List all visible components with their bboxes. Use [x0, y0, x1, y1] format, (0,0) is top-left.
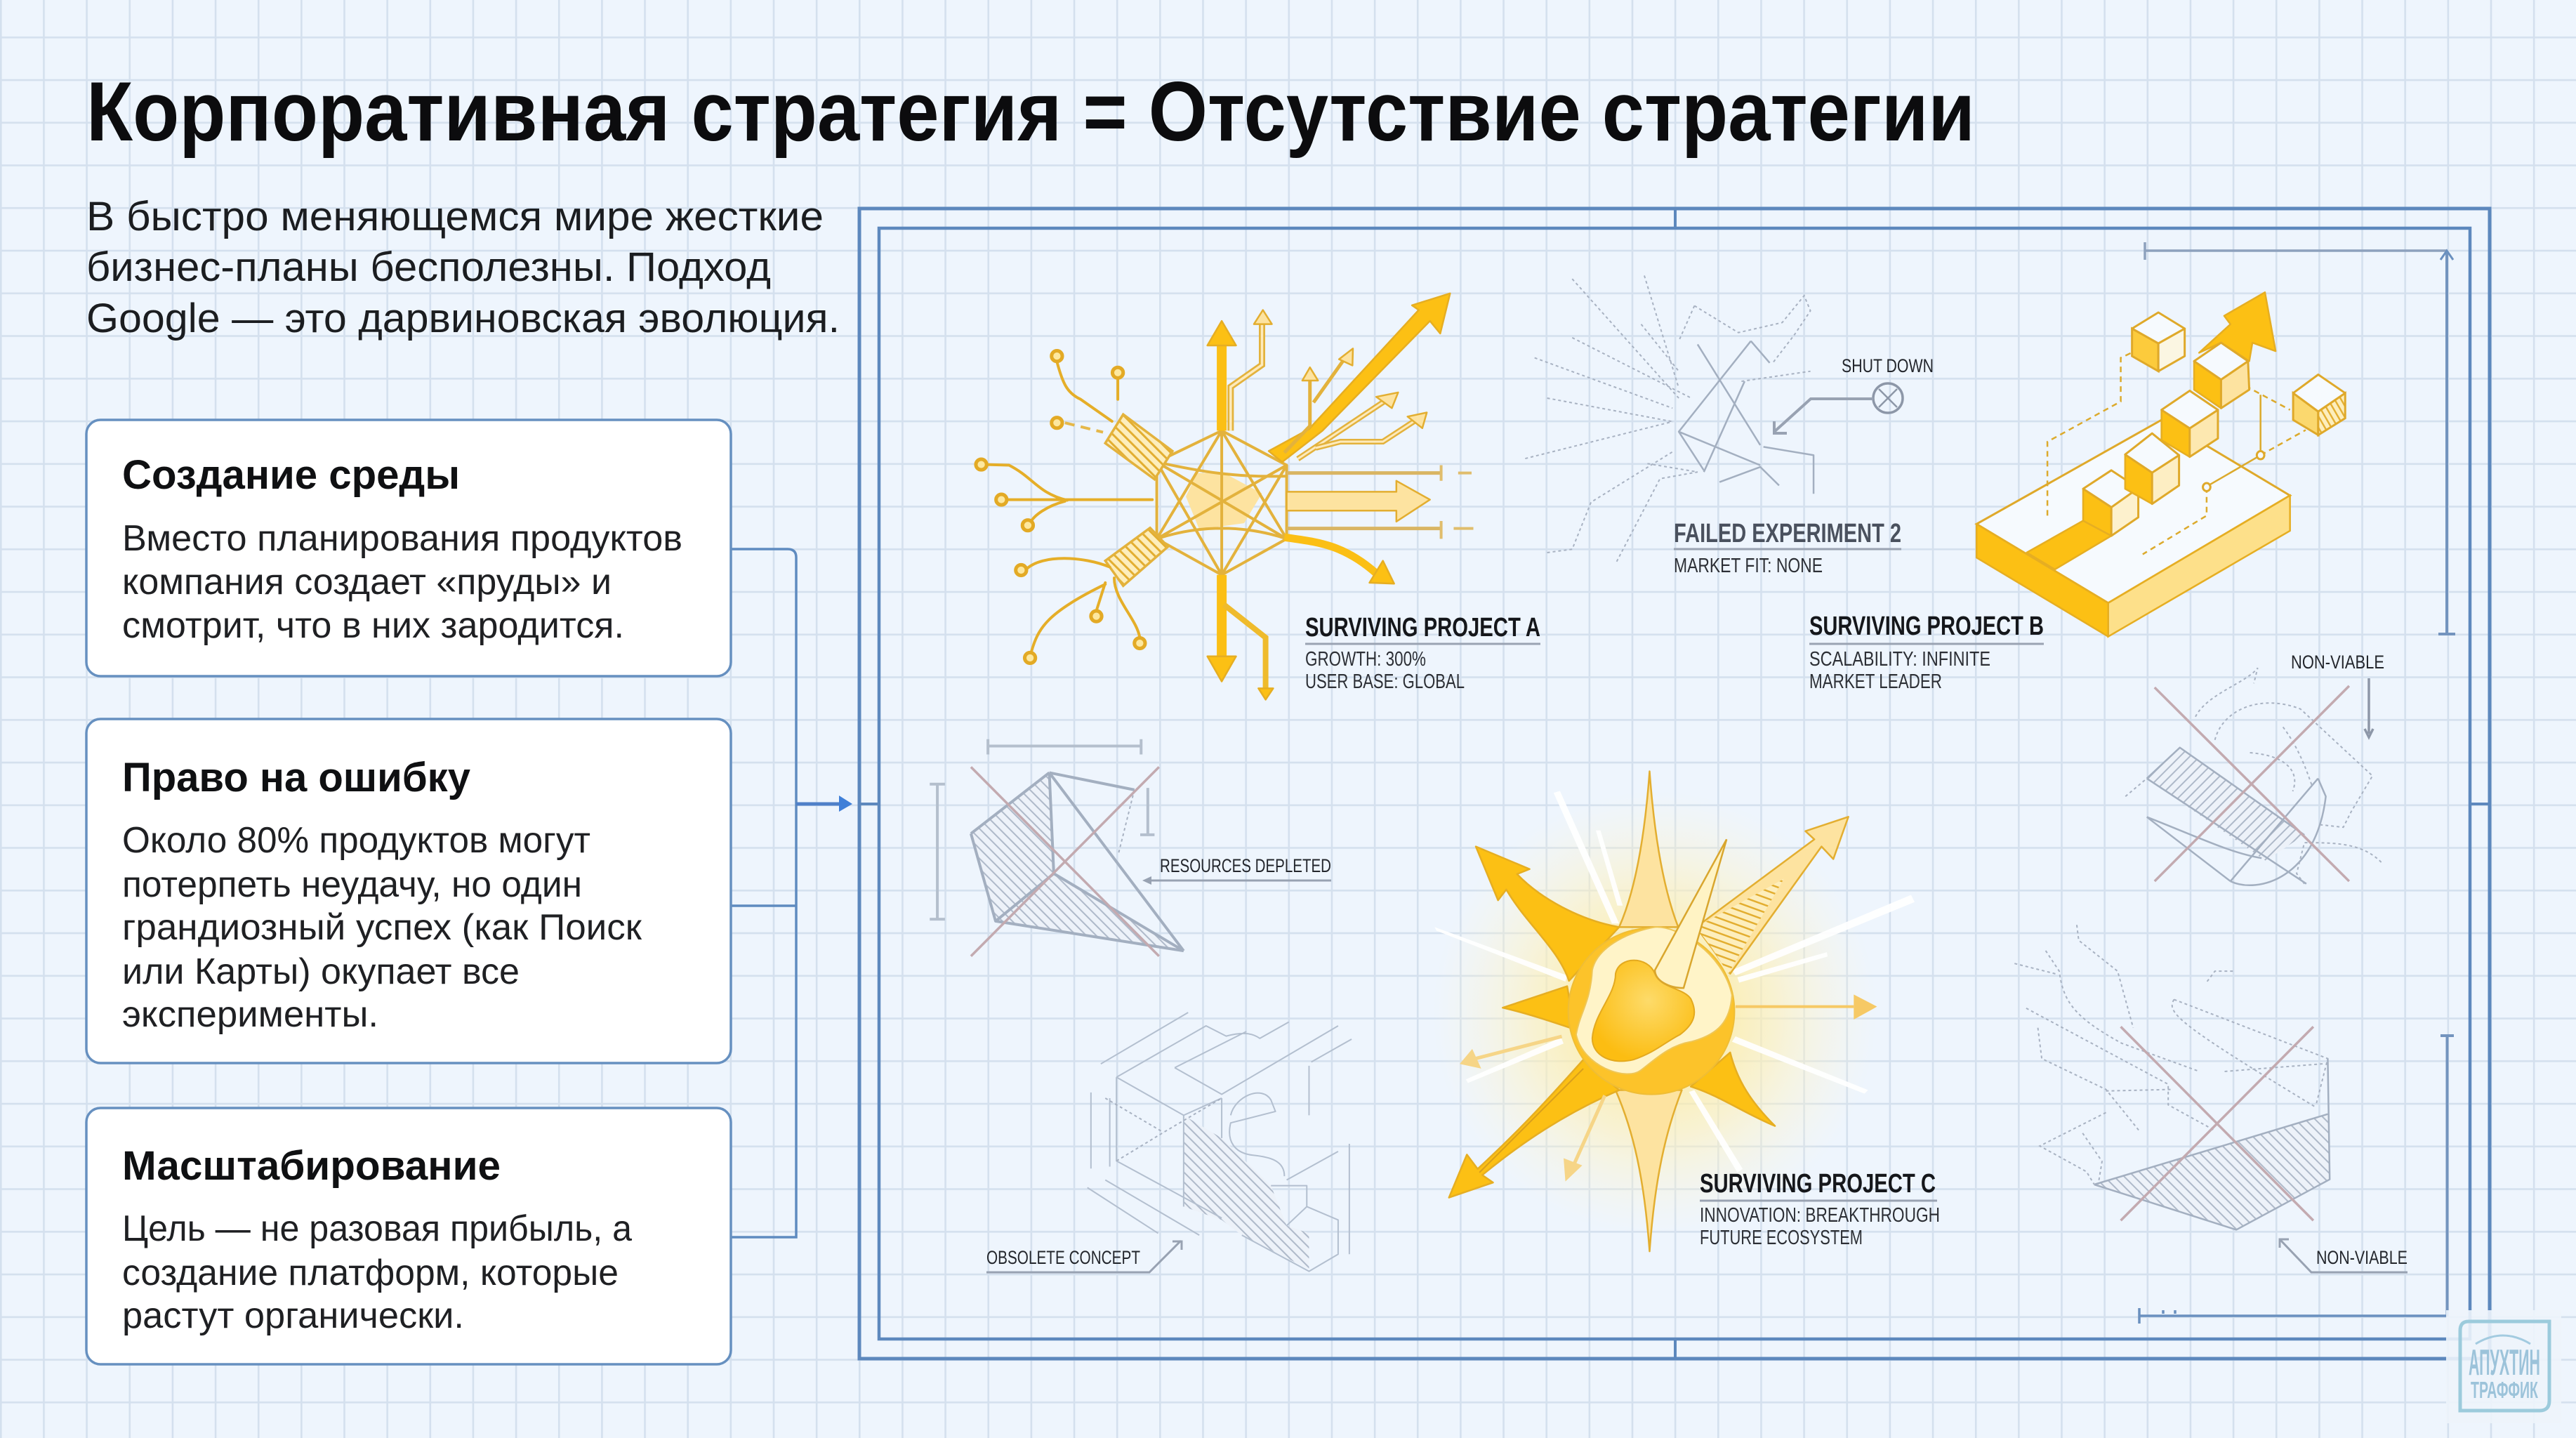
- root nodes: [976, 351, 1145, 664]
- card heading: Право на ошибку: [122, 755, 470, 800]
- illustration: surviving project C: [1433, 771, 1915, 1251]
- label: surviving project A: GROWTH: 300%: [1305, 648, 1426, 671]
- label: resources depleted: [1142, 855, 1331, 885]
- card body: растут органически.: [122, 1295, 464, 1336]
- label: surviving project C: [1700, 1169, 1940, 1249]
- watermark logo: [2446, 1310, 2561, 1423]
- card body: грандиозный успех (как Поиск: [122, 907, 642, 948]
- white rays: [1434, 791, 1915, 1173]
- gold arrows: [1449, 847, 1775, 1198]
- card body: [122, 820, 642, 1035]
- card body: или Карты) окупает все: [122, 951, 520, 992]
- illustration: surviving project B: [1976, 292, 2345, 637]
- arrow: main up: [1208, 310, 1272, 430]
- card heading: Создание среды: [122, 452, 460, 498]
- card body: Цель — не разовая прибыль, а: [122, 1208, 632, 1249]
- hatched connectors: [1105, 414, 1173, 586]
- card body: смотрит, что в них зародится.: [122, 605, 624, 646]
- illustration: obsolete concept sketch: [1088, 1012, 1352, 1272]
- arrow: big diagonal: [1269, 293, 1450, 462]
- panel: card Создание среды: [86, 420, 731, 676]
- label: failed experiment 2: [1674, 519, 1901, 577]
- panel: blueprint frame: [859, 209, 2490, 1359]
- label: non-viable bottom: NON-VIABLE: [2316, 1247, 2407, 1268]
- card body: потерпеть неудачу, но один: [122, 864, 582, 905]
- label: failed experiment 2: MARKET FIT: NONE: [1674, 555, 1823, 577]
- illustration: non-viable sketch bottom: [2014, 925, 2330, 1229]
- dashed connectors: [2047, 346, 2306, 554]
- intro text: бизнес-планы бесполезны. Подход: [86, 244, 771, 290]
- illustration: resources depleted sketch: [930, 739, 1184, 956]
- card body: эксперименты.: [122, 994, 378, 1035]
- intro text: В быстро меняющемся мире жесткие: [86, 194, 824, 239]
- card body: [122, 1208, 632, 1336]
- intro text: Google — это дарвиновская эволюция.: [86, 296, 840, 341]
- icon: shut down marker: [1774, 383, 1903, 433]
- panel: card Право на ошибку: [86, 719, 731, 1063]
- label: failed experiment 2: FAILED EXPERIMENT 2: [1674, 519, 1901, 548]
- label: surviving project B: SCALABILITY: INFINITE: [1809, 648, 1990, 671]
- floating cubes: [2132, 312, 2345, 491]
- label: surviving project A: USER BASE: GLOBAL: [1305, 671, 1465, 693]
- label: non-viable top: [2291, 652, 2384, 737]
- card body: создание платформ, которые: [122, 1253, 619, 1293]
- intro text: [86, 194, 840, 341]
- illustration: surviving project A: [976, 293, 1474, 699]
- card body: Вместо планирования продуктов: [122, 518, 682, 559]
- connector from cards to frame: [732, 549, 852, 1237]
- hexagon core: [1157, 430, 1287, 575]
- card heading: Масштабирование: [122, 1143, 501, 1189]
- pale spikes: [1616, 771, 1682, 1251]
- label: surviving project C: INNOVATION: BREAKTHROUGH: [1700, 1204, 1940, 1227]
- pale arrows: [1460, 994, 1877, 1182]
- arrow: into blueprint: [839, 796, 852, 812]
- arrows: right group: [1284, 465, 1474, 583]
- root lines: [986, 362, 1152, 652]
- core sphere: [1568, 839, 1734, 1095]
- panel: card Масштабирование: [86, 1108, 731, 1364]
- label: surviving project A: SURVIVING PROJECT A: [1305, 613, 1540, 642]
- label: surviving project A: [1305, 613, 1540, 693]
- illustration: non-viable sketch top: [2125, 668, 2382, 885]
- bars: [2083, 343, 2250, 536]
- label: surviving project B: SURVIVING PROJECT B: [1809, 612, 2044, 641]
- card body: компания создает «пруды» и: [122, 562, 612, 602]
- card body: [122, 518, 682, 646]
- label: non-viable bottom: [2280, 1239, 2407, 1272]
- label: obsolete concept: OBSOLETE CONCEPT: [986, 1247, 1140, 1268]
- label: non-viable top: NON-VIABLE: [2291, 652, 2384, 673]
- glow: [1433, 791, 1877, 1235]
- illustration: failed experiment 2: [1525, 275, 1814, 562]
- platform: [1976, 420, 2290, 637]
- label: shut down: SHUT DOWN: [1842, 355, 1934, 376]
- label: resources depleted: RESOURCES DEPLETED: [1160, 855, 1331, 876]
- label: obsolete concept: [986, 1241, 1182, 1272]
- hatched arrow: [1696, 817, 1849, 974]
- label: surviving project C: SURVIVING PROJECT C: [1700, 1169, 1936, 1199]
- card body: Около 80% продуктов могут: [122, 820, 590, 861]
- title: Корпоративная стратегия = Отсутствие стратегии: [86, 65, 1975, 159]
- arrows: small diagonal branches: [1284, 348, 1427, 459]
- label: surviving project B: [1809, 612, 2044, 693]
- label: surviving project B: MARKET LEADER: [1809, 671, 1942, 693]
- label: surviving project C: FUTURE ECOSYSTEM: [1700, 1227, 1863, 1249]
- arrow: rising: [2199, 292, 2276, 361]
- arrow: main down: [1208, 575, 1273, 699]
